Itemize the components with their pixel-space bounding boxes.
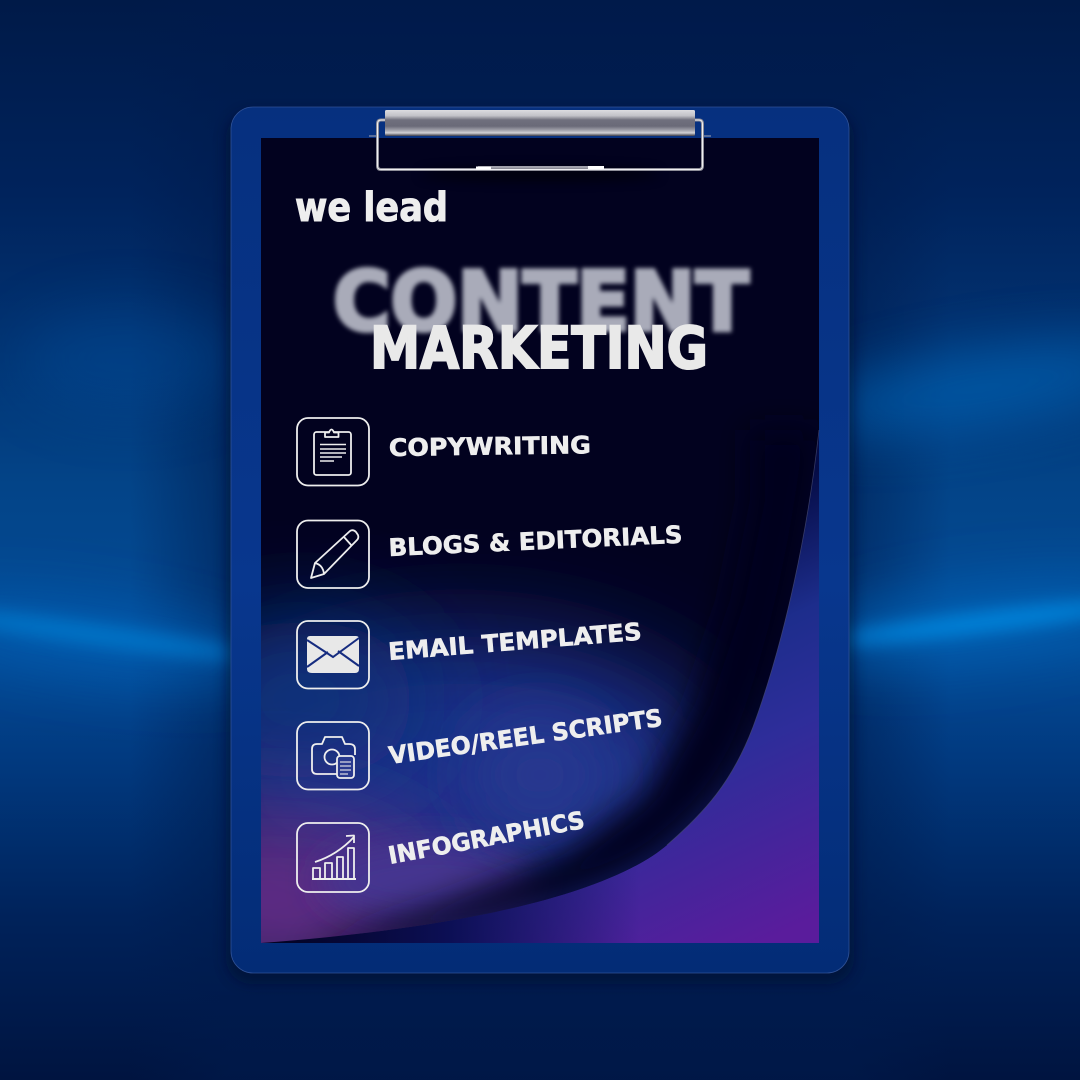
label: video and reel scripts: VIDEO/REEL SCRIPTS <box>387 704 664 770</box>
wire loop <box>378 120 702 170</box>
metal clip <box>369 110 711 180</box>
icon: camera with script <box>297 722 369 790</box>
curled back of page <box>261 430 819 943</box>
icon: envelope <box>297 621 369 688</box>
glow: upper left <box>20 310 240 410</box>
label: copywriting: COPYWRITING <box>389 431 591 462</box>
curl edge highlight <box>667 430 819 845</box>
label: blogs and editorials: BLOGS & EDITORIALS <box>388 521 683 562</box>
logo: we lead <box>295 185 448 231</box>
title: content (blurred): CONTENT <box>333 255 749 350</box>
icon: growth chart <box>297 823 369 892</box>
label: email templates: EMAIL TEMPLATES <box>387 618 643 666</box>
list item: blogs and editorials <box>297 520 683 588</box>
list item: email templates <box>297 618 643 688</box>
icon: clipboard <box>297 418 369 486</box>
paper sheet <box>261 138 820 943</box>
title <box>333 255 749 382</box>
clip bar <box>385 110 695 136</box>
clipboard board <box>226 107 854 984</box>
label: infographics: INFOGRAPHICS <box>386 806 587 870</box>
list item: copywriting <box>297 418 591 486</box>
list item: video and reel scripts <box>297 704 664 790</box>
icon: pencil <box>297 520 369 588</box>
glow: lower left <box>0 589 267 691</box>
front of page <box>261 138 819 943</box>
list item: infographics <box>297 806 587 892</box>
title: marketing: MARKETING <box>370 314 708 382</box>
clip tabs <box>369 135 711 137</box>
glow: upper right <box>807 332 1080 444</box>
glow: lower right <box>808 572 1080 672</box>
